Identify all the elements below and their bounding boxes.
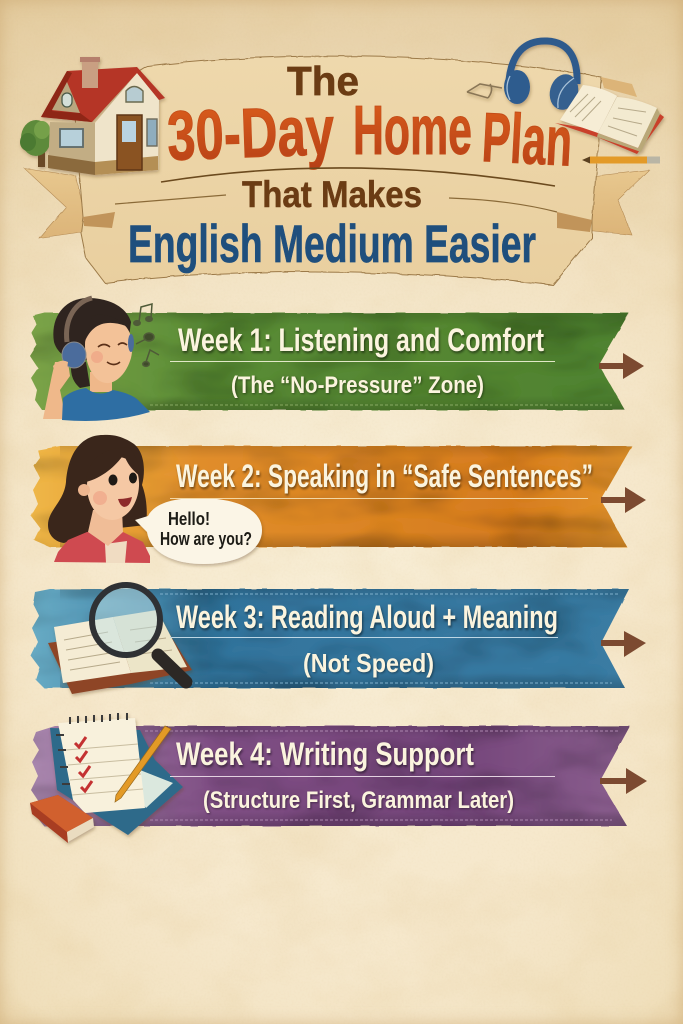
ribbon xyxy=(30,313,629,410)
subtitle: (Structure First, Grammar Later) xyxy=(203,787,514,814)
pencil xyxy=(115,726,171,802)
face xyxy=(87,457,139,520)
blouse xyxy=(105,541,127,563)
underline xyxy=(170,361,555,362)
ribbon xyxy=(31,726,630,826)
hand xyxy=(53,361,68,378)
title heading: The: The xyxy=(287,58,359,104)
left ribbon tail xyxy=(24,168,110,238)
right ribbon tail xyxy=(556,170,649,235)
title heading: 30-Day Home Plan: Home xyxy=(353,91,472,169)
speech bubble: How are you? xyxy=(160,529,252,549)
underline xyxy=(170,498,588,499)
shirt xyxy=(62,388,150,421)
title heading: 30-Day Home Plan: 30-Day xyxy=(166,91,335,175)
underline xyxy=(170,776,555,777)
neck xyxy=(90,372,112,392)
ear xyxy=(78,484,90,496)
eyes and smile xyxy=(98,343,127,364)
hair xyxy=(53,298,131,360)
stitching xyxy=(150,404,612,406)
dormer window xyxy=(62,93,72,107)
red book xyxy=(30,795,93,843)
arrow xyxy=(600,768,647,794)
book pages xyxy=(140,770,173,808)
mouth xyxy=(118,497,132,507)
arrow xyxy=(599,353,644,379)
heading: Week 4: Writing Support xyxy=(176,736,474,772)
heading: Week 1: Listening and Comfort xyxy=(178,322,544,358)
edge shading xyxy=(60,313,629,410)
panel: week 2 xyxy=(31,435,646,564)
headphones xyxy=(67,298,92,342)
arrow xyxy=(601,631,646,657)
checks xyxy=(75,737,92,791)
checklist paper xyxy=(58,718,145,813)
curved divider xyxy=(161,168,555,186)
door xyxy=(117,115,142,170)
spiral xyxy=(70,713,127,724)
icon: pencil xyxy=(582,156,660,164)
icon: house xyxy=(20,57,165,175)
side wall xyxy=(48,122,95,175)
edge shading xyxy=(60,726,630,826)
panel: week 3 xyxy=(31,585,646,694)
tab behind book xyxy=(601,77,637,97)
dormer xyxy=(52,82,80,113)
attic window xyxy=(126,86,143,102)
icon: notebook and checklist xyxy=(30,713,183,843)
ponytail xyxy=(71,360,90,388)
cardigan xyxy=(54,532,150,563)
icon: girl with headphones xyxy=(43,298,150,421)
fringe xyxy=(86,448,140,482)
side window xyxy=(60,129,83,147)
icon: headphones xyxy=(467,41,582,113)
front wall xyxy=(95,73,159,175)
edge shading xyxy=(60,589,629,688)
arrow xyxy=(601,487,646,513)
subtitle: (The “No-Pressure” Zone) xyxy=(231,372,484,399)
ribbon xyxy=(31,446,632,547)
eyes xyxy=(108,474,118,486)
scroll panel xyxy=(74,56,601,285)
face xyxy=(85,321,132,383)
title heading: 30-Day Home Plan: Plan xyxy=(480,98,574,181)
fringe xyxy=(84,315,126,344)
icon: open book xyxy=(48,610,192,694)
arm xyxy=(43,362,70,419)
hair back xyxy=(48,435,147,543)
tree xyxy=(20,120,51,167)
icon: magnifying glass xyxy=(92,585,186,682)
panel: week 4 xyxy=(30,713,647,843)
underline xyxy=(170,637,558,638)
cheek xyxy=(91,351,103,363)
chimney xyxy=(80,57,100,88)
icon: music notes xyxy=(134,304,159,366)
cheek xyxy=(93,491,107,505)
icon: girl speaking xyxy=(48,435,150,563)
panel: week 1 xyxy=(30,298,644,421)
title heading: That Makes: That Makes xyxy=(242,174,422,215)
right window xyxy=(147,119,157,146)
scroll fold shadows xyxy=(83,212,592,232)
blue book xyxy=(50,728,183,835)
roof xyxy=(41,67,165,122)
roof shading xyxy=(41,71,92,122)
title banner xyxy=(24,56,649,285)
subtitle: (Not Speed) xyxy=(303,648,434,678)
heading: Week 3: Reading Aloud + Meaning xyxy=(176,599,558,635)
title heading: 30-Day Home Plan xyxy=(166,91,574,181)
stitching xyxy=(145,731,620,820)
stitching xyxy=(150,594,618,683)
ribbon xyxy=(31,589,629,688)
bubble text: Hello! xyxy=(168,509,210,529)
neck xyxy=(88,510,123,546)
icon: open book xyxy=(555,85,664,154)
stone base xyxy=(48,155,95,175)
edge shading xyxy=(60,446,632,547)
speech bubble xyxy=(135,498,262,564)
